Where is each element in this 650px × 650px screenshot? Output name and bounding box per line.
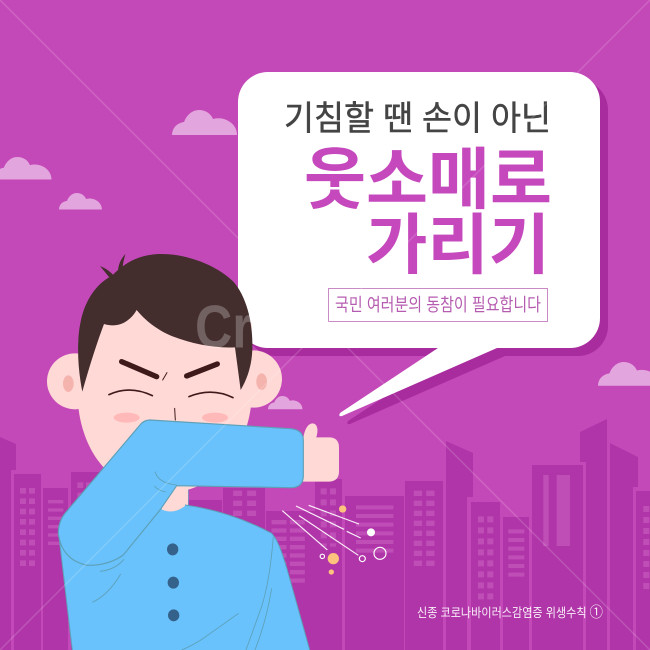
- eyebrows: [122, 362, 217, 377]
- spray lines: [282, 505, 361, 555]
- ring droplets: [320, 547, 386, 562]
- raised arm: [58, 420, 303, 565]
- footer caption: 신종 코로나바이러스감염증 위생수칙 ①: [417, 604, 603, 621]
- tagline box: [328, 288, 548, 322]
- cloud: top centre: [172, 110, 237, 135]
- watermark: Cr: [195, 293, 252, 360]
- building windows (right): [279, 475, 646, 600]
- person coughing into sleeve: [47, 254, 339, 650]
- cloud: small left: [59, 193, 102, 210]
- bubble headline: [304, 143, 552, 282]
- neck: [160, 480, 188, 514]
- neck collar overlap: [162, 498, 185, 512]
- shirt folds: [92, 472, 273, 650]
- fist with thumb: [298, 423, 339, 482]
- bubble intro line: 기침할 땐 손이 아닌: [284, 100, 551, 138]
- clouds: [0, 110, 650, 409]
- hair: [78, 254, 252, 392]
- ears: [47, 350, 282, 409]
- speech bubble: [238, 72, 600, 416]
- orange droplets: [328, 505, 346, 575]
- cloud: behind ear: [268, 396, 302, 409]
- hair tufts: [100, 254, 125, 279]
- shirt buttons: [167, 543, 179, 621]
- speech bubble shadow: [246, 80, 608, 424]
- eyes and frown: [109, 373, 233, 420]
- cloud: right: [598, 362, 650, 386]
- tagline box: 국민 여러분의 동참이 필요합니다: [335, 295, 541, 315]
- headline line 1: 웃소매로: [304, 143, 552, 218]
- cough droplets: [282, 505, 386, 575]
- head: [47, 254, 282, 514]
- building windows (left): [23, 482, 252, 567]
- blue shirt: [58, 420, 311, 650]
- white droplet: [367, 528, 375, 536]
- city skyline: [0, 419, 650, 650]
- torso: [59, 503, 311, 650]
- face: [78, 299, 252, 490]
- cloud: left: [0, 157, 52, 180]
- cheeks: [114, 413, 228, 423]
- headline line 2: 가리기: [366, 208, 550, 282]
